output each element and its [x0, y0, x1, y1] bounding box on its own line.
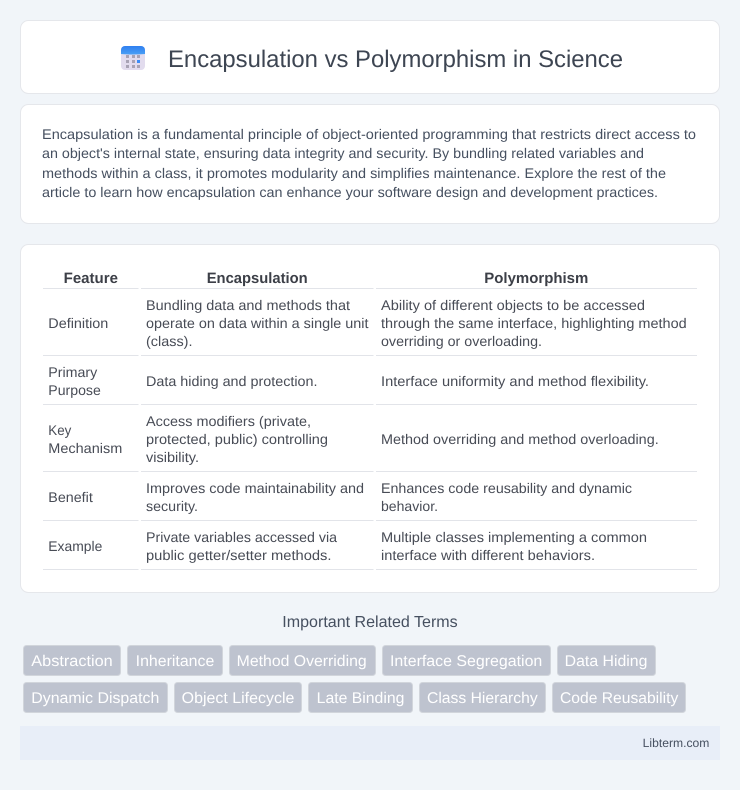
- tag: object lifecycle: Object Lifecycle: [182, 690, 294, 707]
- row: definition: (class).: [146, 333, 192, 349]
- panel: header: [20, 20, 720, 94]
- row: example: interface with different behaviors.: [381, 547, 595, 563]
- icon: calendar: [121, 46, 145, 70]
- footer credit: Libterm.com: [643, 736, 709, 750]
- tag: data hiding: Data Hiding: [565, 653, 647, 670]
- tag: class hierarchy: [420, 682, 546, 712]
- row: key mechanism: Key: [48, 422, 71, 438]
- row: definition: through the same interface, highlighting method: [381, 315, 687, 331]
- row: primary purpose: Data hiding and protection.: [146, 373, 318, 389]
- row: definition: Bundling data and methods that: [146, 297, 350, 313]
- row: key mechanism: Method overriding and method overloading.: [381, 431, 659, 447]
- row: example: Multiple classes implementing a common: [381, 529, 647, 545]
- tag: interface segregation: Interface Segregation: [390, 653, 542, 670]
- row: definition: Definition: [48, 315, 108, 331]
- row: primary purpose: Purpose: [48, 382, 101, 398]
- text block: introduction: Encapsulation is a fundamental principle of object-oriented programming that restricts direct access to: [42, 126, 696, 142]
- title: Encapsulation vs Polymorphism in Science: [168, 46, 623, 73]
- tag: dynamic dispatch: Dynamic Dispatch: [31, 690, 159, 707]
- row: example: Example: [48, 538, 103, 554]
- row: key mechanism: protected, public) controlling: [146, 431, 328, 447]
- row: key mechanism: visibility.: [146, 449, 199, 465]
- row: definition: operate on data within a single unit: [146, 315, 369, 331]
- row: benefit: security.: [146, 498, 198, 514]
- row: example: [43, 529, 697, 570]
- row: key mechanism: Mechanism: [48, 440, 122, 456]
- row: benefit: Benefit: [48, 489, 93, 505]
- row: definition: [43, 297, 697, 356]
- tag: inheritance: Inheritance: [136, 653, 214, 670]
- footer bar: [20, 726, 720, 760]
- tag: interface segregation: [382, 646, 550, 676]
- tag: inheritance: [128, 646, 222, 676]
- tags: related terms: [24, 646, 686, 712]
- row: example: Private variables accessed via: [146, 529, 337, 545]
- table header: Feature: [64, 270, 118, 287]
- text block: introduction: article to learn how encapsulation can enhance your software design and development practices.: [42, 184, 658, 200]
- tag: data hiding: [558, 646, 656, 676]
- text block: introduction: methods within a class, it promotes modularity and simplifies maintenance. Explore the rest of the: [42, 165, 666, 181]
- tag: code reusability: Code Reusability: [560, 690, 679, 707]
- table header: Encapsulation: [207, 270, 308, 287]
- tag: dynamic dispatch: [24, 682, 168, 712]
- row: primary purpose: Interface uniformity and method flexibility.: [381, 373, 649, 389]
- table header: Polymorphism: [484, 270, 588, 287]
- row: definition: overriding or overloading.: [381, 333, 542, 349]
- heading: important related terms: Important Related Terms: [282, 614, 458, 631]
- row: benefit: [43, 480, 697, 521]
- row: primary purpose: [43, 364, 697, 405]
- row: primary purpose: Primary: [48, 364, 97, 380]
- tag: method overriding: Method Overriding: [237, 653, 367, 670]
- tag: object lifecycle: [174, 682, 302, 712]
- text block: introduction: an object's internal state, ensuring data integrity and security. By bundling related variables and: [42, 145, 644, 161]
- row: benefit: behavior.: [381, 498, 438, 514]
- tag: late binding: [308, 682, 412, 712]
- tag: abstraction: Abstraction: [31, 653, 113, 670]
- row: key mechanism: [43, 413, 697, 472]
- table header: [43, 270, 697, 289]
- tag: code reusability: [552, 682, 686, 712]
- row: example: public getter/setter methods.: [146, 547, 332, 563]
- tag: abstraction: [24, 646, 120, 676]
- row: benefit: Enhances code reusability and dynamic: [381, 480, 632, 496]
- tag: class hierarchy: Class Hierarchy: [427, 690, 538, 707]
- panel: introduction: [20, 104, 720, 224]
- panel: comparison table: [20, 244, 720, 592]
- row: benefit: Improves code maintainability and: [146, 480, 364, 496]
- row: key mechanism: Access modifiers (private,: [146, 413, 311, 429]
- row: definition: Ability of different objects to be accessed: [381, 297, 645, 313]
- text block: introduction: [42, 126, 696, 200]
- tag: late binding: Late Binding: [317, 690, 404, 707]
- tag: method overriding: [230, 646, 376, 676]
